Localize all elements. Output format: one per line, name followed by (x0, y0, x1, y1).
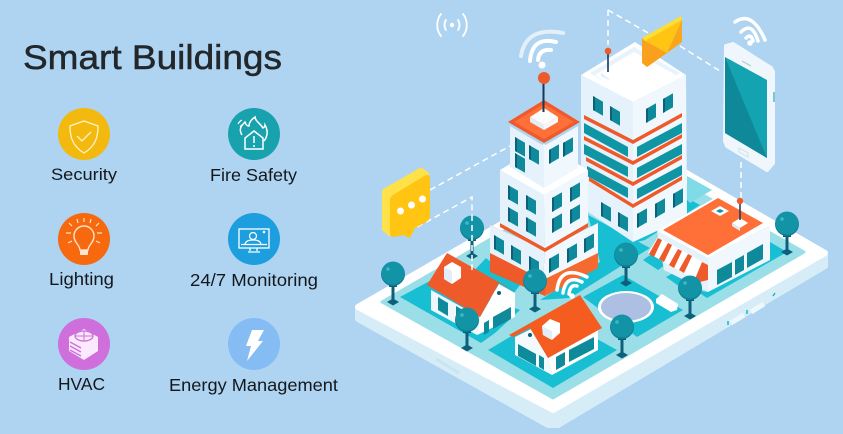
icon: fire safety (228, 108, 280, 160)
icon: hvac unit (58, 318, 110, 370)
icon: energy lightning bolt (228, 318, 280, 370)
icon: smartphone (725, 44, 775, 170)
icon: monitoring screen (228, 213, 280, 265)
dashed connector lines (417, 10, 741, 267)
title: Smart Buildings (23, 39, 282, 77)
pool (598, 291, 678, 323)
icon: wifi on tablet (557, 273, 587, 299)
illustration: isometric smart city on tablet (358, 10, 825, 425)
label: energy management: Energy Management (169, 375, 338, 395)
icon: wifi above tower (521, 32, 563, 69)
label: security: Security (51, 165, 118, 184)
icon: wifi above phone (735, 19, 765, 46)
trees (381, 212, 799, 358)
house: left (427, 253, 518, 335)
icon: lighting bulb (58, 213, 110, 265)
label: 24/7 monitoring: 24/7 Monitoring (190, 270, 318, 290)
tablet base (358, 145, 825, 425)
panel: smart building features (49, 108, 338, 395)
label: fire safety: Fire Safety (210, 165, 297, 185)
label: lighting: Lighting (49, 269, 114, 289)
icon: envelope (642, 16, 682, 67)
house: front (509, 295, 602, 375)
building: shop (648, 196, 770, 292)
label: hvac: HVAC (58, 374, 105, 394)
building: right tower (581, 42, 687, 242)
icon: broadcast signal (437, 14, 467, 36)
icon: chat bubble (382, 168, 430, 238)
icon: security shield (58, 108, 110, 160)
building: left tower (490, 72, 598, 296)
